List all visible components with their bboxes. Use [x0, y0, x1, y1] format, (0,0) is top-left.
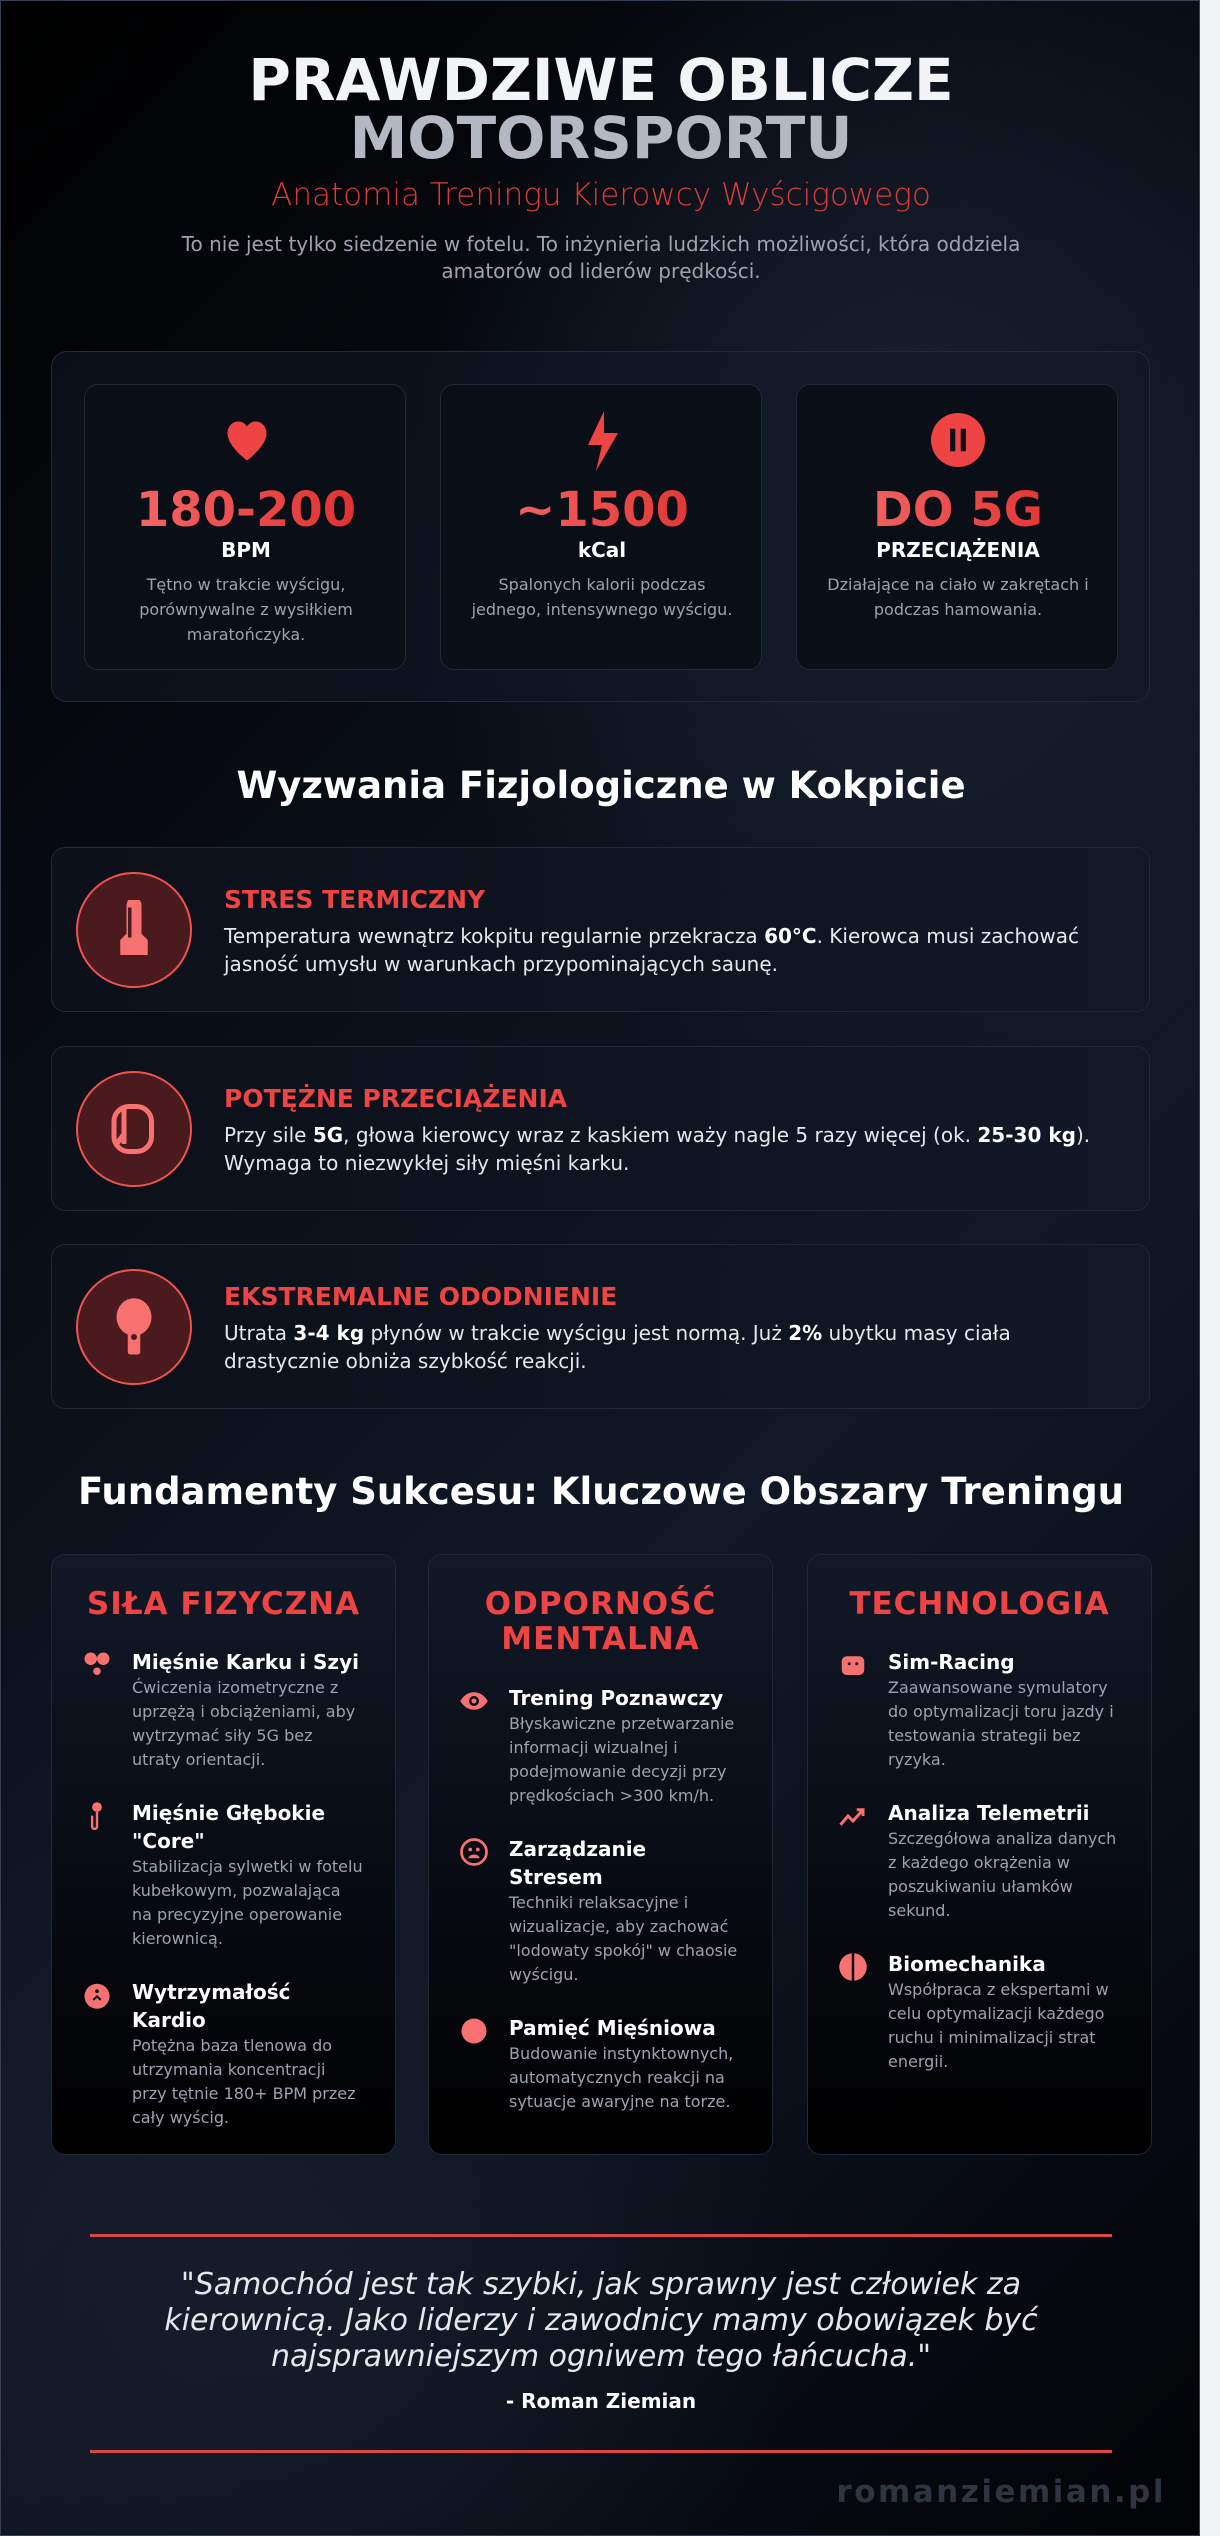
panel: thermal stress: Temperatura wewnątrz kokpitu regularnie przekracza 60°C. Kierowca musi zachować jasność umysłu w warunkach przypominających saunę.	[224, 924, 1079, 976]
item: sim racing: Zaawansowane symulatory do optymalizacji toru jazdy i testowania strategii bez ryzyka.	[888, 1678, 1114, 1769]
stat card: BPM: BPM	[221, 538, 271, 562]
item: neck	[84, 1650, 359, 1769]
item: cardio: Wytrzymałość	[132, 1980, 290, 2004]
item: core: Mięśnie Głębokie "Core"	[132, 1801, 325, 1853]
stat card: 5G: Działające na ciało w zakrętach i	[827, 575, 1089, 594]
panel: g-forces	[51, 1046, 1150, 1211]
stat card: 5G	[796, 384, 1118, 670]
icon: heart	[228, 422, 266, 460]
item: cardio: Potężna baza tlenowa do utrzymania koncentracji przy tętnie 180+ BPM przez cały wyścig.	[132, 2036, 356, 2127]
item: telemetry	[839, 1801, 1116, 1920]
item: sim racing	[842, 1650, 1114, 1769]
stat card: kcal: ~1500	[515, 482, 689, 538]
item: cardio: Kardio	[132, 2008, 206, 2032]
icon: lightning	[588, 411, 618, 471]
panel: mental resilience: MENTALNA	[501, 1621, 700, 1657]
item: stress: Zarządzanie	[509, 1837, 646, 1861]
stat card: kcal: jednego, intensywnego wyścigu.	[472, 600, 732, 619]
icon: thermometer	[76, 872, 192, 988]
title	[248, 46, 954, 172]
panel: thermal stress	[51, 847, 1150, 1012]
item: core: Stabilizacja sylwetki w fotelu kubełkowym, pozwalająca na precyzyjne operowanie kierownicą.	[132, 1857, 363, 1948]
panel: dehydration: Utrata 3-4 kg płynów w trakcie wyścigu jest normą. Już 2% ubytku masy ciała drastycznie obniża szybkość reakcji.	[224, 1321, 1011, 1373]
item: telemetry: Analiza Telemetrii	[888, 1801, 1090, 1825]
stat card: BPM: porównywalne z wysiłkiem	[139, 600, 353, 619]
stat card: kcal: kCal	[578, 538, 626, 562]
stat card: kcal	[440, 384, 762, 670]
title: PRAWDZIWE OBLICZE	[248, 46, 954, 114]
intro text: To nie jest tylko siedzenie w fotelu. To inżynieria ludzkich możliwości, która oddziela amatorów od liderów prędkości.	[182, 232, 1020, 283]
item: biomechanics	[839, 1952, 1109, 2071]
quote	[90, 2234, 1112, 2453]
item: core	[90, 1801, 363, 1948]
stat card: 5G: PRZECIĄŻENIA	[876, 538, 1040, 562]
title: MOTORSPORTU	[350, 104, 852, 172]
panel: physical strength: SIŁA FIZYCZNA	[87, 1586, 360, 1622]
item: stress: Techniki relaksacyjne i wizualizacje, aby zachować "lodowaty spokój" w chaosie wyścigu.	[509, 1893, 737, 1984]
panel: technology	[807, 1554, 1152, 2155]
item: neck: Mięśnie Karku i Szyi	[132, 1650, 359, 1674]
item: cognitive: Trening Poznawczy	[509, 1686, 723, 1710]
stat card: 5G: DO 5G	[873, 482, 1043, 538]
panel: g-forces: Przy sile 5G, głowa kierowcy wraz z kaskiem waży nagle 5 razy więcej (ok. 25-30 kg). Wymaga to niezwykłej siły mięśni karku.	[224, 1123, 1090, 1175]
heading: training areas: Fundamenty Sukcesu: Kluczowe Obszary Treningu	[78, 1470, 1124, 1513]
item: cognitive	[460, 1686, 734, 1805]
item: muscle memory: Budowanie instynktownych, automatycznych reakcji na sytuacje awaryjne na torze.	[509, 2044, 733, 2111]
item: biomechanics: Biomechanika	[888, 1952, 1046, 1976]
panel: dehydration	[51, 1244, 1150, 1409]
subtitle: Anatomia Treningu Kierowcy Wyścigowego	[271, 177, 931, 213]
panel: thermal stress: STRES TERMICZNY	[224, 885, 485, 914]
panel: technology: TECHNOLOGIA	[849, 1586, 1110, 1622]
stat card: BPM	[84, 384, 406, 670]
item: stress	[460, 1837, 737, 1984]
stat card: 5G: podczas hamowania.	[874, 600, 1042, 619]
stat card: BPM: Tętno w trakcie wyścigu,	[147, 575, 345, 594]
watermark: romanziemian.pl	[836, 2474, 1166, 2510]
item: cardio	[84, 1980, 356, 2127]
panel: mental resilience: ODPORNOŚĆ	[485, 1586, 716, 1622]
item: cognitive: Błyskawiczne przetwarzanie informacji wizualnej i podejmowanie decyzji przy prędkościach >300 km/h.	[509, 1714, 734, 1805]
item: stress: Stresem	[509, 1865, 603, 1889]
stat card: kcal: Spalonych kalorii podczas	[498, 575, 706, 594]
quote: - Roman Ziemian	[506, 2389, 696, 2413]
item: muscle memory	[462, 2016, 733, 2111]
panel: stats	[51, 351, 1150, 702]
stat card: BPM: maratończyka.	[187, 625, 305, 644]
item: biomechanics: Współpraca z ekspertami w celu optymalizacji każdego ruchu i minimalizacji strat energii.	[888, 1980, 1109, 2071]
panel: g-forces: POTĘŻNE PRZECIĄŻENIA	[224, 1084, 567, 1113]
item: neck: utraty orientacji.	[132, 1750, 265, 1769]
panel: physical strength	[51, 1554, 396, 2155]
heading: challenges: Wyzwania Fizjologiczne w Kokpicie	[236, 764, 966, 807]
item: sim racing: Sim-Racing	[888, 1650, 1015, 1674]
stat card: BPM: 180-200	[136, 482, 356, 538]
icon: head	[76, 1071, 192, 1187]
panel: mental resilience	[428, 1554, 773, 2155]
item: telemetry: Szczegółowa analiza danych z każdego okrążenia w poszukiwaniu ułamków sekund.	[888, 1829, 1116, 1920]
icon: drop	[76, 1269, 192, 1385]
quote: "Samochód jest tak szybki, jak sprawny jest człowiek za kierownicą. Jako liderzy i zawodnicy mamy obowiązek być najsprawniejszym ogniwem tego łańcucha."	[164, 2267, 1038, 2374]
icon: pause circle	[931, 413, 985, 467]
item: muscle memory: Pamięć Mięśniowa	[509, 2016, 716, 2040]
item: neck: Ćwiczenia izometryczne z uprzężą i obciążeniami, aby wytrzymać siły 5G bez	[132, 1678, 355, 1745]
panel: dehydration: EKSTREMALNE ODODNIENIE	[224, 1282, 617, 1311]
